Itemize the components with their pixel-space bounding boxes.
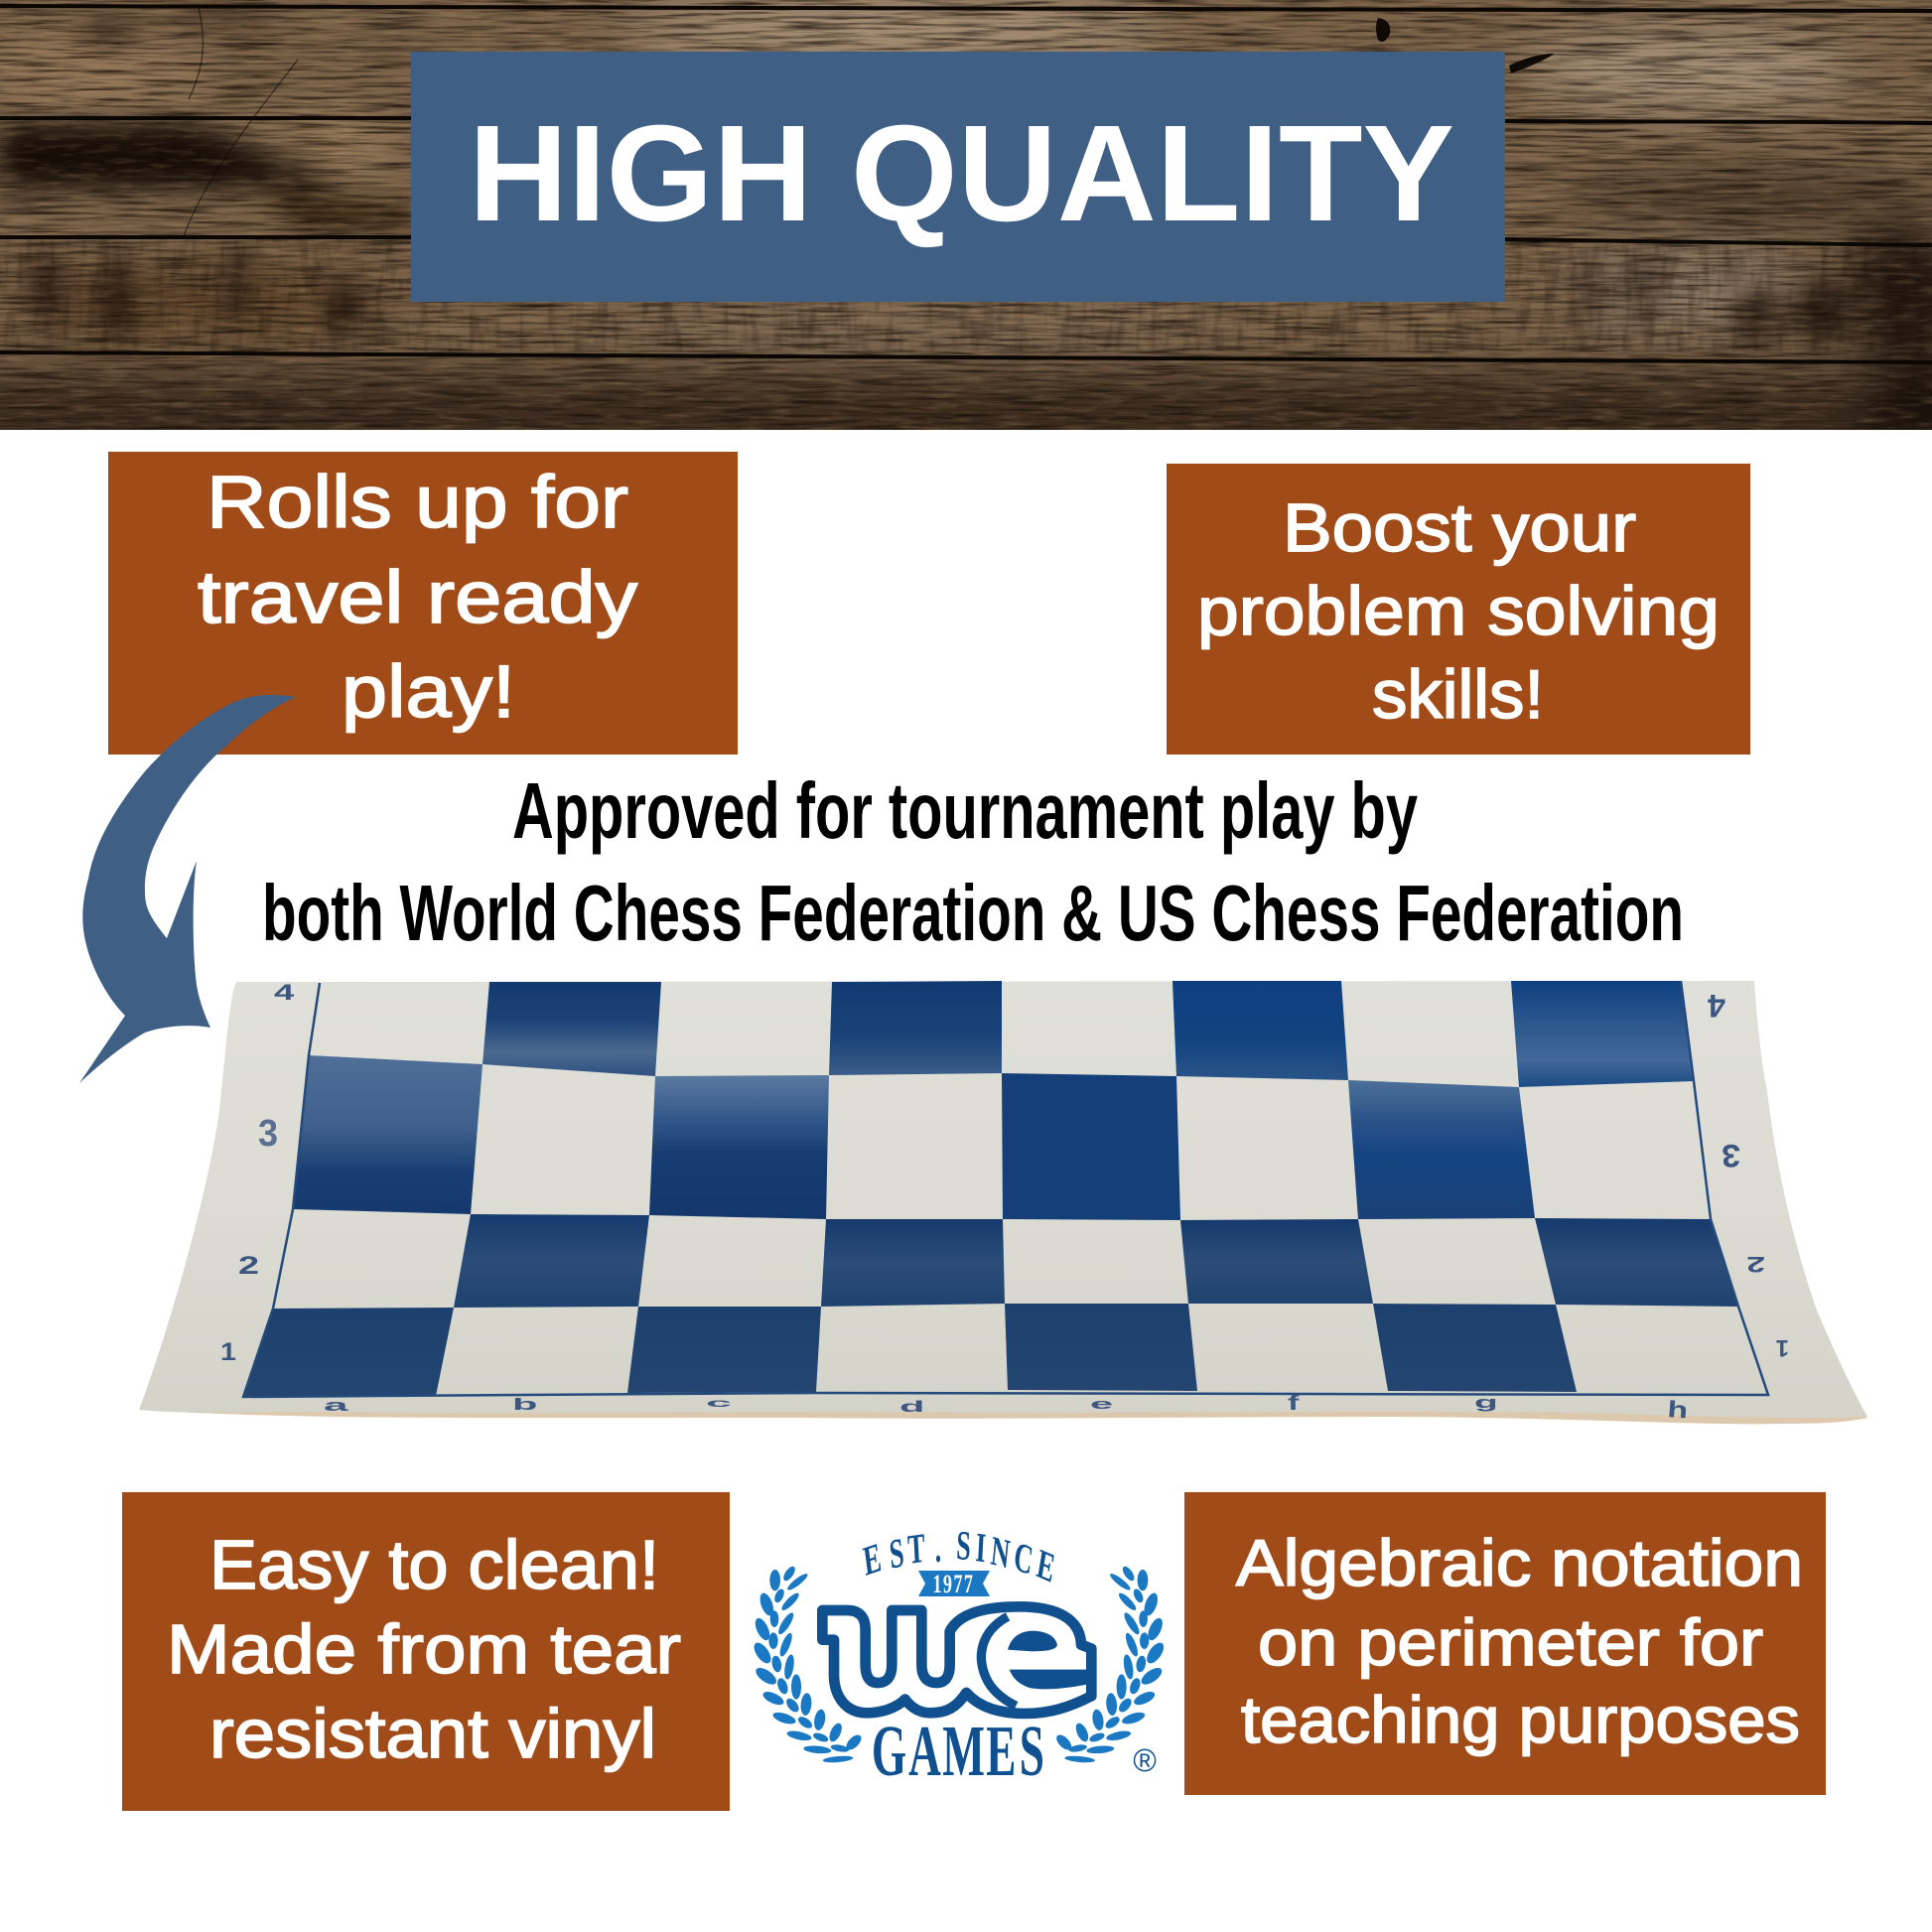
games wordmark: GAMES (872, 1712, 1044, 1792)
callout: rolls up for travel: play! (342, 650, 515, 733)
callout: easy to clean: Easy to clean! (209, 1526, 659, 1603)
file labels (324, 1391, 1689, 1424)
1977 ribbon (918, 1570, 990, 1598)
est. since arc text: EST. SINCE (861, 1522, 1058, 1592)
rank labels right (inverted): 3 (1722, 1137, 1740, 1173)
title text: HIGH QUALITY (469, 97, 1454, 250)
callout: rolls up for travel (108, 452, 738, 755)
rank labels left: 2 (238, 1251, 259, 1279)
laurel wreaths (751, 1565, 1167, 1763)
WE monogram (822, 1606, 1091, 1714)
callout: rolls up for travel: Rolls up for (207, 461, 628, 543)
file labels: e (1090, 1396, 1113, 1412)
rank 2 dark squares (454, 1214, 1738, 1308)
file labels: f (1288, 1391, 1300, 1414)
file labels: h (1667, 1397, 1689, 1424)
callout: algebraic notation: teaching purposes (1241, 1683, 1800, 1756)
file labels: g (1474, 1393, 1498, 1412)
WE Games logo (751, 1522, 1167, 1792)
rank labels right (inverted): 1 (1776, 1334, 1789, 1361)
vinyl chess board (139, 981, 1867, 1424)
file labels: b (512, 1395, 537, 1414)
callout: boost problem solving: Boost your (1283, 489, 1636, 566)
rank labels right (inverted): 2 (1746, 1252, 1765, 1276)
file labels: c (706, 1397, 732, 1410)
registered mark: ® (1133, 1742, 1157, 1778)
approval statement: Approved for tournament play by (512, 766, 1418, 855)
callout: easy to clean: resistant vinyl (209, 1695, 656, 1772)
callout: easy to clean (122, 1492, 730, 1811)
callout: boost problem solving (1167, 464, 1750, 755)
file labels: a (324, 1396, 348, 1415)
rank labels left (220, 981, 294, 1366)
callout: algebraic notation (1184, 1492, 1826, 1795)
callout: boost problem solving: problem solving (1197, 573, 1720, 649)
callout: algebraic notation: on perimeter for (1258, 1605, 1763, 1679)
callout: algebraic notation: Algebraic notation (1236, 1526, 1803, 1599)
approval statement (262, 766, 1684, 957)
file labels: d (899, 1398, 924, 1415)
rank labels left: 4 (274, 981, 294, 1005)
1977 ribbon: 1977 (932, 1570, 974, 1598)
wood plank header background (0, 0, 1932, 463)
rank labels left: 1 (220, 1338, 236, 1366)
rank 4 dark squares (483, 981, 1694, 1087)
rank labels right (inverted) (1708, 988, 1789, 1361)
rank labels left: 3 (258, 1112, 278, 1154)
rank labels right (inverted): 4 (1708, 988, 1725, 1024)
title banner (411, 52, 1505, 302)
rank 1 dark squares (243, 1304, 1577, 1397)
rank 3 dark squares (293, 1055, 1535, 1220)
callout: rolls up for travel: travel ready (198, 556, 637, 638)
callout: easy to clean: Made from tear (167, 1610, 681, 1688)
curved arrow pointing to board (79, 695, 296, 1083)
callout: boost problem solving: skills! (1372, 656, 1544, 733)
